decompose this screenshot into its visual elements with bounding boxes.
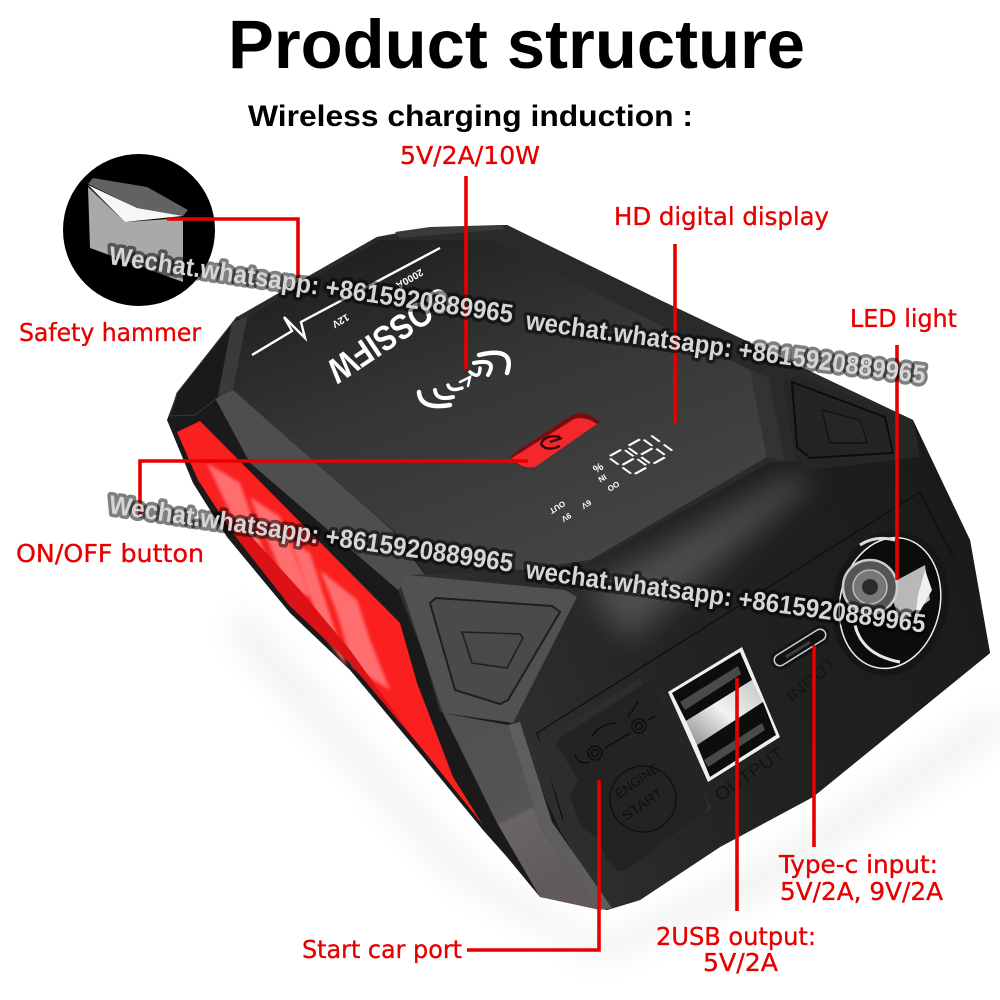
label: type-c input: Type-c input: (778, 850, 938, 879)
label: HD digital display: HD digital display (614, 202, 829, 231)
watermark row 2 (107, 489, 928, 639)
label: safety hammer: Safety hammer (19, 318, 202, 347)
label: LED light: LED light (850, 304, 957, 333)
text: 12V: 12V (330, 311, 351, 330)
device silhouette (167, 225, 990, 910)
port cover: engine start (537, 678, 712, 880)
watermark row 2: wechat.whatsapp: +8615920889965 (523, 554, 928, 639)
label: 2usb output: 5V/2A (703, 948, 778, 977)
label: type-c input (778, 850, 943, 906)
title: Product structure (228, 6, 805, 83)
corner bumper: right (783, 375, 920, 470)
front highlight sheen (585, 475, 815, 640)
indicator: OO: OO (606, 479, 621, 493)
label: on/off button: ON/OFF button (16, 539, 204, 568)
watermark row 1 (107, 240, 928, 390)
leader lines (140, 176, 897, 950)
voltage line graphic (252, 248, 440, 355)
text: input: INPUT (784, 654, 841, 706)
label: type-c input: 5V/2A, 9V/2A (780, 877, 943, 906)
inset: safety hammer (63, 154, 215, 306)
text: start: START (619, 785, 665, 823)
ground shadow (230, 600, 1000, 965)
button: on/off (510, 414, 600, 468)
device: jump starter (167, 225, 990, 910)
text: engine: ENGINE (612, 760, 662, 801)
label: 2usb output (656, 922, 816, 977)
text: output: OUTPUT (711, 743, 788, 805)
icon: power (541, 436, 562, 449)
rim strip right (750, 370, 785, 462)
watermark row 2: Wechat.whatsapp: +8615920889965 (107, 489, 515, 578)
corner bumper: left (170, 317, 247, 416)
rim strip left (218, 317, 247, 396)
usb ports (668, 647, 780, 782)
label: wireless spec: 5V/2A/10W (400, 141, 540, 170)
front face (398, 457, 990, 910)
back clip (395, 225, 505, 238)
corner bumper: front (400, 575, 577, 723)
digital display 188 (608, 434, 674, 475)
front-left grey panel (443, 713, 612, 910)
indicator: 9V: 9V (559, 511, 573, 524)
label: start car port: Start car port (302, 935, 462, 964)
brand logo: GOSSIFW (320, 278, 459, 390)
top rim (225, 225, 920, 580)
watermark row 1: wechat.whatsapp: +8615920889965 (523, 305, 928, 390)
heading: wireless charging: Wireless charging induction : (248, 100, 693, 133)
type-c port (780, 635, 820, 660)
car icon (575, 702, 655, 763)
icon: wireless charging (419, 353, 509, 406)
led flashlight (818, 520, 962, 686)
top face (233, 240, 767, 570)
watermark row 1: Wechat.whatsapp: +8615920889965 (107, 240, 515, 329)
indicator: percent: % (591, 461, 606, 476)
red rubber side (177, 421, 503, 857)
panel seam line (537, 492, 955, 820)
indicator: 6V: 6V (579, 498, 593, 511)
indicator: IN: IN (596, 472, 608, 484)
label: 2usb output: 2USB output: (656, 922, 816, 951)
grey chamfer (215, 390, 425, 590)
text: 2000A: 2000A (394, 266, 425, 290)
indicator: OUT: OUT (548, 499, 567, 515)
